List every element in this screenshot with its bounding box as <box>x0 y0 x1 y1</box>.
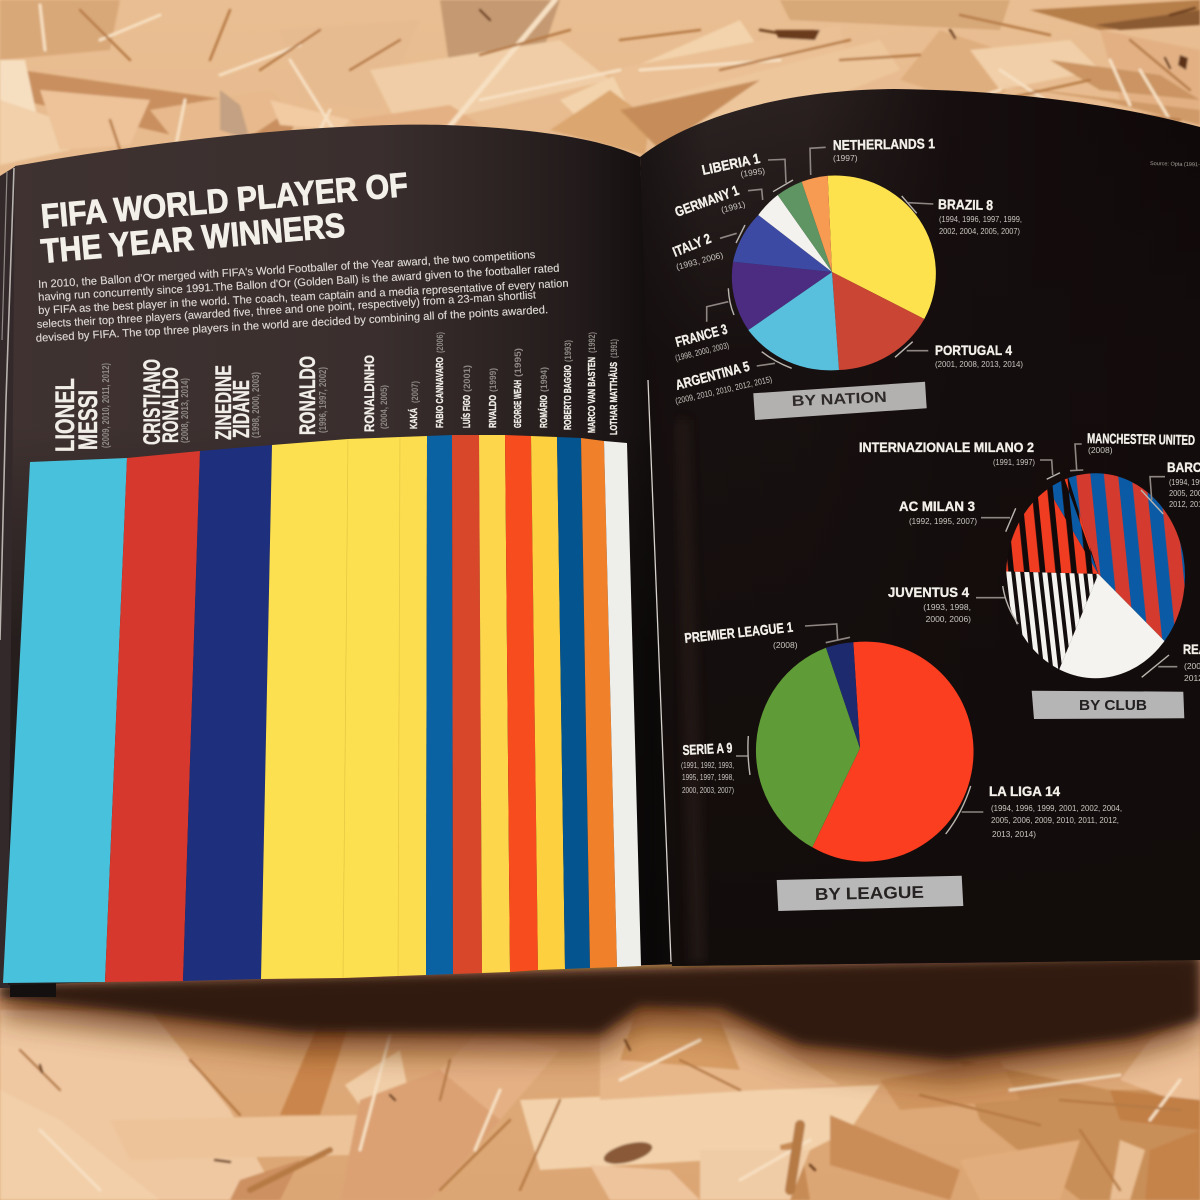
label: Brazil <box>902 196 1022 236</box>
label: Zinedine Zidane <box>211 365 262 440</box>
spine page edge <box>648 380 671 962</box>
label: Fabio Cannavaro: (2006) <box>435 332 445 353</box>
caption: by league: BY LEAGUE <box>815 883 924 904</box>
label: Luis Figo: LUÍS FIGO <box>460 395 473 428</box>
label: Italy: ITALY 2 <box>670 230 713 260</box>
caption: by club: BY CLUB <box>1079 697 1147 714</box>
label: Liberia <box>700 150 793 192</box>
label: Marco van Basten: MARCO VAN BASTEN <box>587 357 598 433</box>
label: Germany: (1991) <box>720 199 746 215</box>
intro text: having run concurrently since 1991.The Ballon d'Or (Golden Ball) is the award given to the footballer rated <box>38 263 560 304</box>
label: La Liga: 2013, 2014) <box>992 829 1036 839</box>
intro text: In 2010, the Ballon d'Or merged with FIFA's World Footballer of the Year award, the two competitions <box>38 249 536 291</box>
label: Kaka: (2007) <box>410 381 420 403</box>
label: AC Milan: AC MILAN 3 <box>899 498 975 514</box>
title: FIFA WORLD PLAYER OF <box>39 166 409 236</box>
label: AC Milan <box>899 498 1016 532</box>
label: Brazil: (1994, 1996, 1997, 1999, <box>939 214 1022 224</box>
label: Roberto Baggio: ROBERTO BAGGIO <box>563 365 574 430</box>
label: Manchester United <box>1070 430 1195 471</box>
bar chart: awards per player <box>3 435 641 983</box>
club labels <box>859 430 1200 683</box>
shadow under book <box>0 955 1200 1080</box>
label: Juventus: JUVENTUS 4 <box>888 584 969 600</box>
label: Premier League <box>684 619 850 650</box>
label: Fabio Cannavaro: FABIO CANNAVARO <box>435 357 446 428</box>
panel: left page <box>8 125 680 985</box>
label: Internazionale Milano: INTERNAZIONALE MILANO 2 <box>859 439 1034 455</box>
label: Cristiano Ronaldo: (2008, 2013, 2014) <box>180 378 191 443</box>
label: Argentina: (2009, 2010, 2010, 2012, 2015) <box>674 374 773 406</box>
intro text: selects their top three players (awarded five, three and one point, respectively) from a 23-man shortlist <box>36 289 536 331</box>
label: Internazionale Milano <box>859 439 1060 479</box>
label: Juventus: 2000, 2006) <box>926 614 971 624</box>
label: George Weah: (1995) <box>513 348 523 377</box>
label: Ronaldinho <box>361 355 389 432</box>
label: Argentina <box>674 352 792 406</box>
label: Juventus: (1993, 1998, <box>923 602 971 612</box>
label: Roberto Baggio: (1993) <box>563 340 573 362</box>
label: Kaka: KAKÁ <box>407 408 420 429</box>
label: Zinedine Zidane: (1998, 2000, 2003) <box>251 372 262 438</box>
label: Italy <box>670 225 745 272</box>
label: Zinedine Zidane: ZINEDINE <box>211 365 236 440</box>
label: Lionel Messi: LIONEL <box>50 378 80 452</box>
intro text <box>35 249 569 345</box>
label: France <box>674 288 734 363</box>
label: Cristiano Ronaldo: RONALDO <box>158 367 183 443</box>
label: Serie A: (1991, 1992, 1993, <box>681 760 734 770</box>
league labels <box>681 619 1122 839</box>
label: Argentina: ARGENTINA 5 <box>674 358 751 393</box>
title <box>39 166 409 271</box>
label: Ronaldinho: (2004, 2005) <box>379 385 389 429</box>
title: THE YEAR WINNERS <box>39 207 347 271</box>
label: Netherlands: NETHERLANDS 1 <box>833 135 935 153</box>
label: Ronaldo <box>295 356 329 435</box>
label: Lionel Messi: MESSI <box>73 390 103 450</box>
label: Juventus <box>888 584 1018 624</box>
label: Serie A: 2000, 2003, 2007) <box>682 785 734 795</box>
label: Ronaldo: (1996, 1997, 2002) <box>318 367 329 433</box>
label: Manchester United: (2008) <box>1088 445 1113 455</box>
label: Rivaldo: (1999) <box>488 368 498 392</box>
label: Portugal: (2001, 2008, 2013, 2014) <box>935 359 1023 369</box>
label: Brazil: 2002, 2004, 2005, 2007) <box>939 226 1020 236</box>
player labels <box>50 332 620 452</box>
label: Internazionale Milano: (1991, 1997) <box>993 457 1035 467</box>
label: Serie A: 1995, 1997, 1998, <box>682 772 734 782</box>
label: Portugal: PORTUGAL 4 <box>935 342 1012 358</box>
label: Romario: ROMÁRIO <box>537 395 550 428</box>
label: La Liga: LA LIGA 14 <box>989 783 1060 799</box>
caption: by nation: BY NATION <box>791 389 887 410</box>
label: Zinedine Zidane: ZIDANE <box>228 380 254 438</box>
label: Luis Figo <box>460 365 473 428</box>
label: Netherlands <box>810 135 935 175</box>
label: Kaka <box>407 381 420 429</box>
label: Marco van Basten: (1992) <box>587 332 597 353</box>
label: Liberia: (1995) <box>740 166 766 179</box>
label: Rivaldo: RIVALDO <box>488 395 499 428</box>
pie chart: by league <box>756 642 974 862</box>
label: Premier League: PREMIER LEAGUE 1 <box>684 619 794 646</box>
label: Cristiano Ronaldo: CRISTIANO <box>139 359 166 445</box>
label: Lionel Messi <box>50 363 112 452</box>
label: Romario <box>537 367 550 428</box>
panel: right page <box>640 89 1200 966</box>
label: George Weah: GEORGE WEAH <box>513 380 524 428</box>
label: La Liga: (1994, 1996, 1999, 2001, 2002, 2004, <box>991 803 1122 813</box>
label: Italy: (1993, 2006) <box>675 250 724 272</box>
intro text: by FIFA as the best player in the world. The coach, team captain and a media representative of every nation <box>38 278 569 317</box>
panel: page edge stack <box>0 166 40 988</box>
label: Netherlands: (1997) <box>833 153 858 163</box>
intro text: devised by FIFA. The top three players in the world are decided by combining all of the points awarded. <box>35 304 548 345</box>
label: Brazil: BRAZIL 8 <box>938 196 993 213</box>
nation labels <box>670 135 1023 406</box>
label: Lothar Matthaus: (1991) <box>609 339 619 358</box>
label: Romario: (1994) <box>539 367 549 392</box>
label: Luis Figo: (2001) <box>462 365 472 392</box>
pie chart: by club <box>1006 473 1185 678</box>
label: La Liga: 2005, 2006, 2009, 2010, 2011, 2012, <box>991 815 1119 825</box>
label: Cristiano Ronaldo <box>139 359 191 445</box>
label: Real Madrid <box>1142 641 1200 683</box>
label: France: (1998, 2000, 2003) <box>674 340 730 363</box>
label: Lothar Matthaus: LOTHAR MATTHÄUS <box>607 362 620 435</box>
label: Portugal <box>895 342 1023 369</box>
caption: by league <box>777 876 963 911</box>
label: Lionel Messi: (2009, 2010, 2011, 2012) <box>101 363 112 448</box>
label: Ronaldinho: RONALDINHO <box>361 355 377 432</box>
label: Premier League: (2008) <box>773 640 798 650</box>
label: Ronaldo: RONALDO <box>295 356 320 435</box>
pie chart: by nation <box>732 175 936 370</box>
caption: by club <box>1032 691 1184 719</box>
label: France: FRANCE 3 <box>674 321 729 350</box>
label: Germany: GERMANY 1 <box>673 182 741 220</box>
label: Serie A <box>681 736 750 795</box>
label: La Liga <box>946 783 1122 839</box>
label: Serie A: SERIE A 9 <box>682 739 733 758</box>
label: Liberia: LIBERIA 1 <box>700 150 762 178</box>
caption: by nation <box>753 382 927 420</box>
label: AC Milan: (1992, 1995, 2007) <box>909 516 977 526</box>
label: Barcelona <box>1141 459 1200 514</box>
